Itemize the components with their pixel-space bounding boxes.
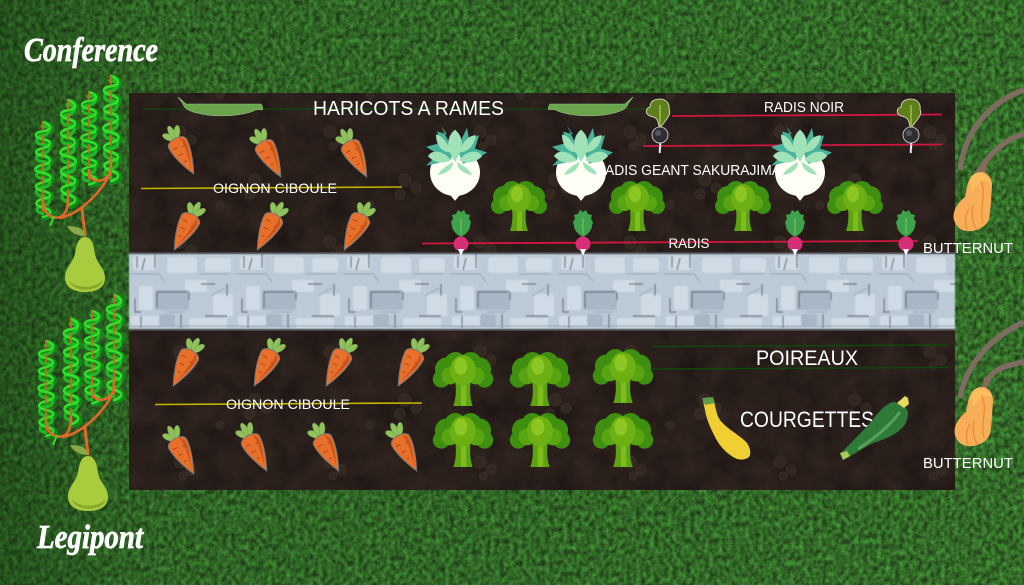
icon: butternut lower [955, 377, 993, 446]
label: oignon ciboule upper: OIGNON CIBOULE [213, 180, 337, 196]
title: conference: Conference [24, 32, 158, 69]
line: radis row [422, 241, 918, 244]
vines: butternut lower [960, 322, 1024, 398]
line: yellow row lower onion [155, 403, 422, 404]
heading: haricots a rames: HARICOTS A RAMES [313, 98, 504, 120]
label: radis geant sakurajima: RADIS GEANT SAKURAJIMA [595, 162, 781, 179]
label: courgettes: COURGETTES [740, 407, 874, 432]
panel: stone path [129, 253, 955, 330]
title: legipont: Legipont [36, 519, 144, 556]
icon: yellow courgette [702, 397, 750, 460]
icon: black radish left [646, 99, 670, 153]
icon: bean pod right [548, 97, 633, 116]
tree: legipont espalier pear [38, 295, 124, 511]
panel: lower soil bed [129, 330, 955, 490]
icon: green courgette [840, 396, 909, 460]
lines: radis noir rows [643, 114, 942, 146]
icon: bean pod left [178, 97, 263, 116]
panel: upper soil bed [129, 93, 955, 253]
group: upper broccoli [491, 181, 883, 231]
line: green row haricots [142, 108, 645, 110]
label: radis noir: RADIS NOIR [764, 99, 844, 116]
label: butternut upper: BUTTERNUT [923, 240, 1013, 257]
vines: butternut upper [960, 90, 1024, 192]
group: giant white radishes [426, 126, 832, 201]
label: butternut lower: BUTTERNUT [923, 455, 1013, 472]
tree: conference espalier pear [35, 76, 121, 292]
line: yellow row upper onion [141, 187, 402, 188]
group: lower carrots [158, 333, 433, 479]
group: pink radishes [451, 210, 916, 256]
lines: poireaux rows [651, 345, 948, 369]
label: poireaux: POIREAUX [756, 347, 858, 370]
icon: black radish right [897, 99, 921, 153]
label: radis: RADIS [668, 235, 710, 251]
group: upper carrots [158, 121, 379, 255]
icon: butternut upper [954, 162, 992, 231]
label: oignon ciboule lower: OIGNON CIBOULE [226, 396, 350, 412]
group: lower broccoli [433, 349, 653, 467]
